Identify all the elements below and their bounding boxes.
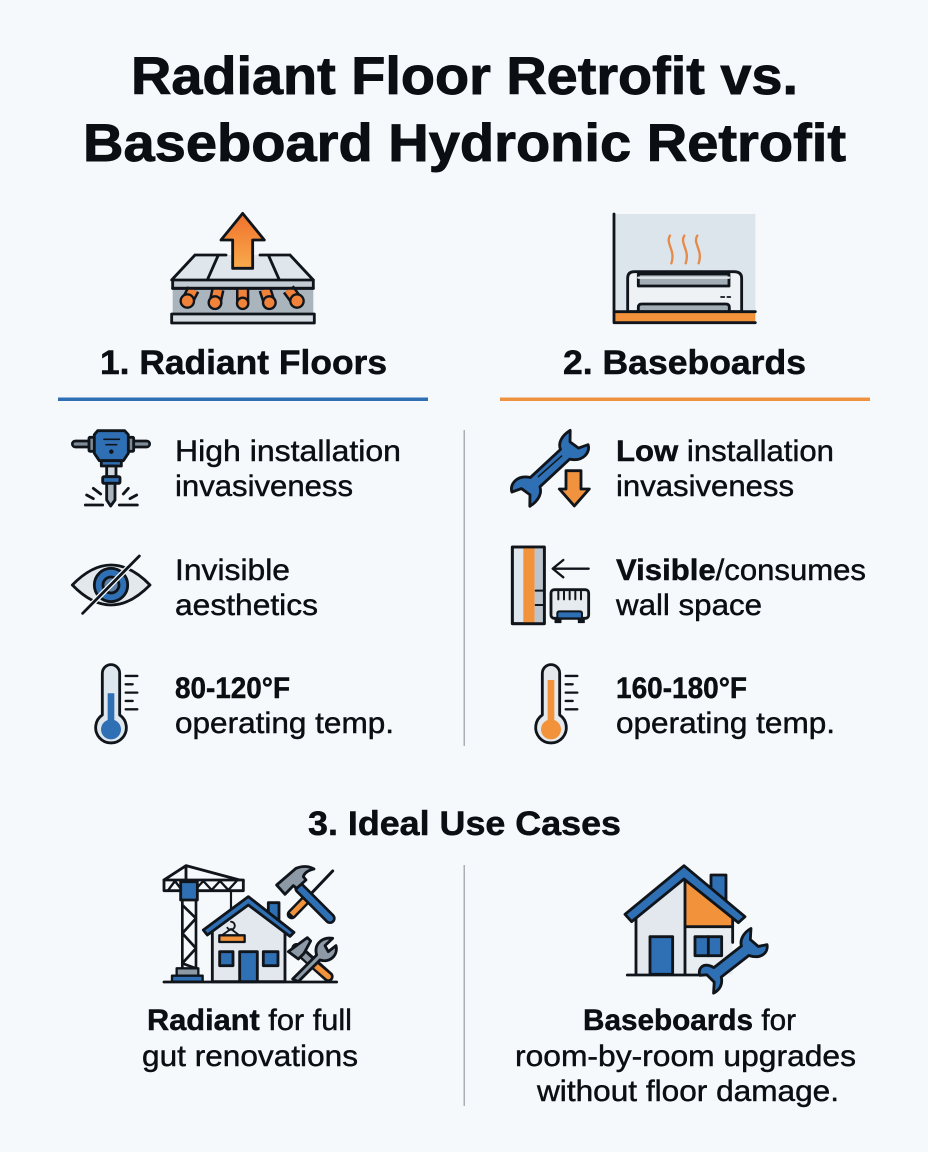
text: radiant for full gut renovations: Radiant for full [147,1004,352,1037]
icon: jackhammer [75,431,147,506]
icon: wrench with down arrow [508,428,592,509]
heading rule blue [58,398,428,401]
text: high installation invasiveness: High installation [175,435,401,468]
divider: column split [464,430,465,746]
text: high installation invasiveness: invasiveness [175,470,353,503]
text: low installation invasiveness [616,435,834,503]
text: 80-120F operating temp: operating temp. [175,707,394,740]
divider: use cases split [464,865,465,1106]
panel: baseboard use case [515,866,856,1108]
text: baseboards for room-by-room upgrades [515,1004,856,1108]
text: 80-120F operating temp [175,672,394,740]
panel: radiant use case [142,866,358,1073]
text: radiant for full gut renovations [142,1004,358,1073]
heading: baseboards: 2. Baseboards [563,344,806,382]
text: baseboards for room-by-room upgrades: without floor damage. [536,1075,839,1108]
heading: radiant floors: 1. Radiant Floors [100,344,387,382]
text: 160-180F operating temp: 160-180°F [616,672,747,705]
icon: orange thermometer [536,665,577,743]
icon: baseboard heater [614,214,755,323]
text: visible consumes wall space: wall space [615,589,762,622]
icon: house with wrench [625,866,770,993]
text: radiant for full gut renovations: gut renovations [142,1040,358,1073]
panel: baseboards [500,214,870,743]
text: high installation invasiveness [175,435,401,503]
text: 160-180F operating temp [616,672,835,740]
text: invisible aesthetics: Invisible [175,554,290,587]
text: baseboards for room-by-room upgrades: Baseboards for [583,1004,796,1037]
icon: blue thermometer [96,665,137,743]
text: 80-120F operating temp: 80-120°F [175,672,290,705]
icon: radiant floor with heat arrow [172,213,314,323]
text: baseboards for room-by-room upgrades: room-by-room upgrades [515,1040,856,1073]
title: Radiant Floor Retrofit vs. [131,47,798,106]
text: visible consumes wall space: Visible/consumes [616,554,866,587]
title [83,47,846,173]
icon: wall space with radiator [512,547,589,624]
text: low installation invasiveness: invasiveness [616,470,794,503]
text: low installation invasiveness: Low installation [616,435,834,468]
icon: crane, house and tools [164,866,337,982]
icon: crossed eye [72,556,150,613]
text: 160-180F operating temp: operating temp. [616,707,835,740]
text: visible consumes wall space [615,554,866,622]
title: Baseboard Hydronic Retrofit [83,114,846,173]
text: invisible aesthetics: aesthetics [175,589,318,622]
panel: radiant floors [58,213,428,743]
heading: ideal use cases: 3. Ideal Use Cases [308,805,621,843]
heading rule orange [500,398,870,401]
text: invisible aesthetics [175,554,318,622]
